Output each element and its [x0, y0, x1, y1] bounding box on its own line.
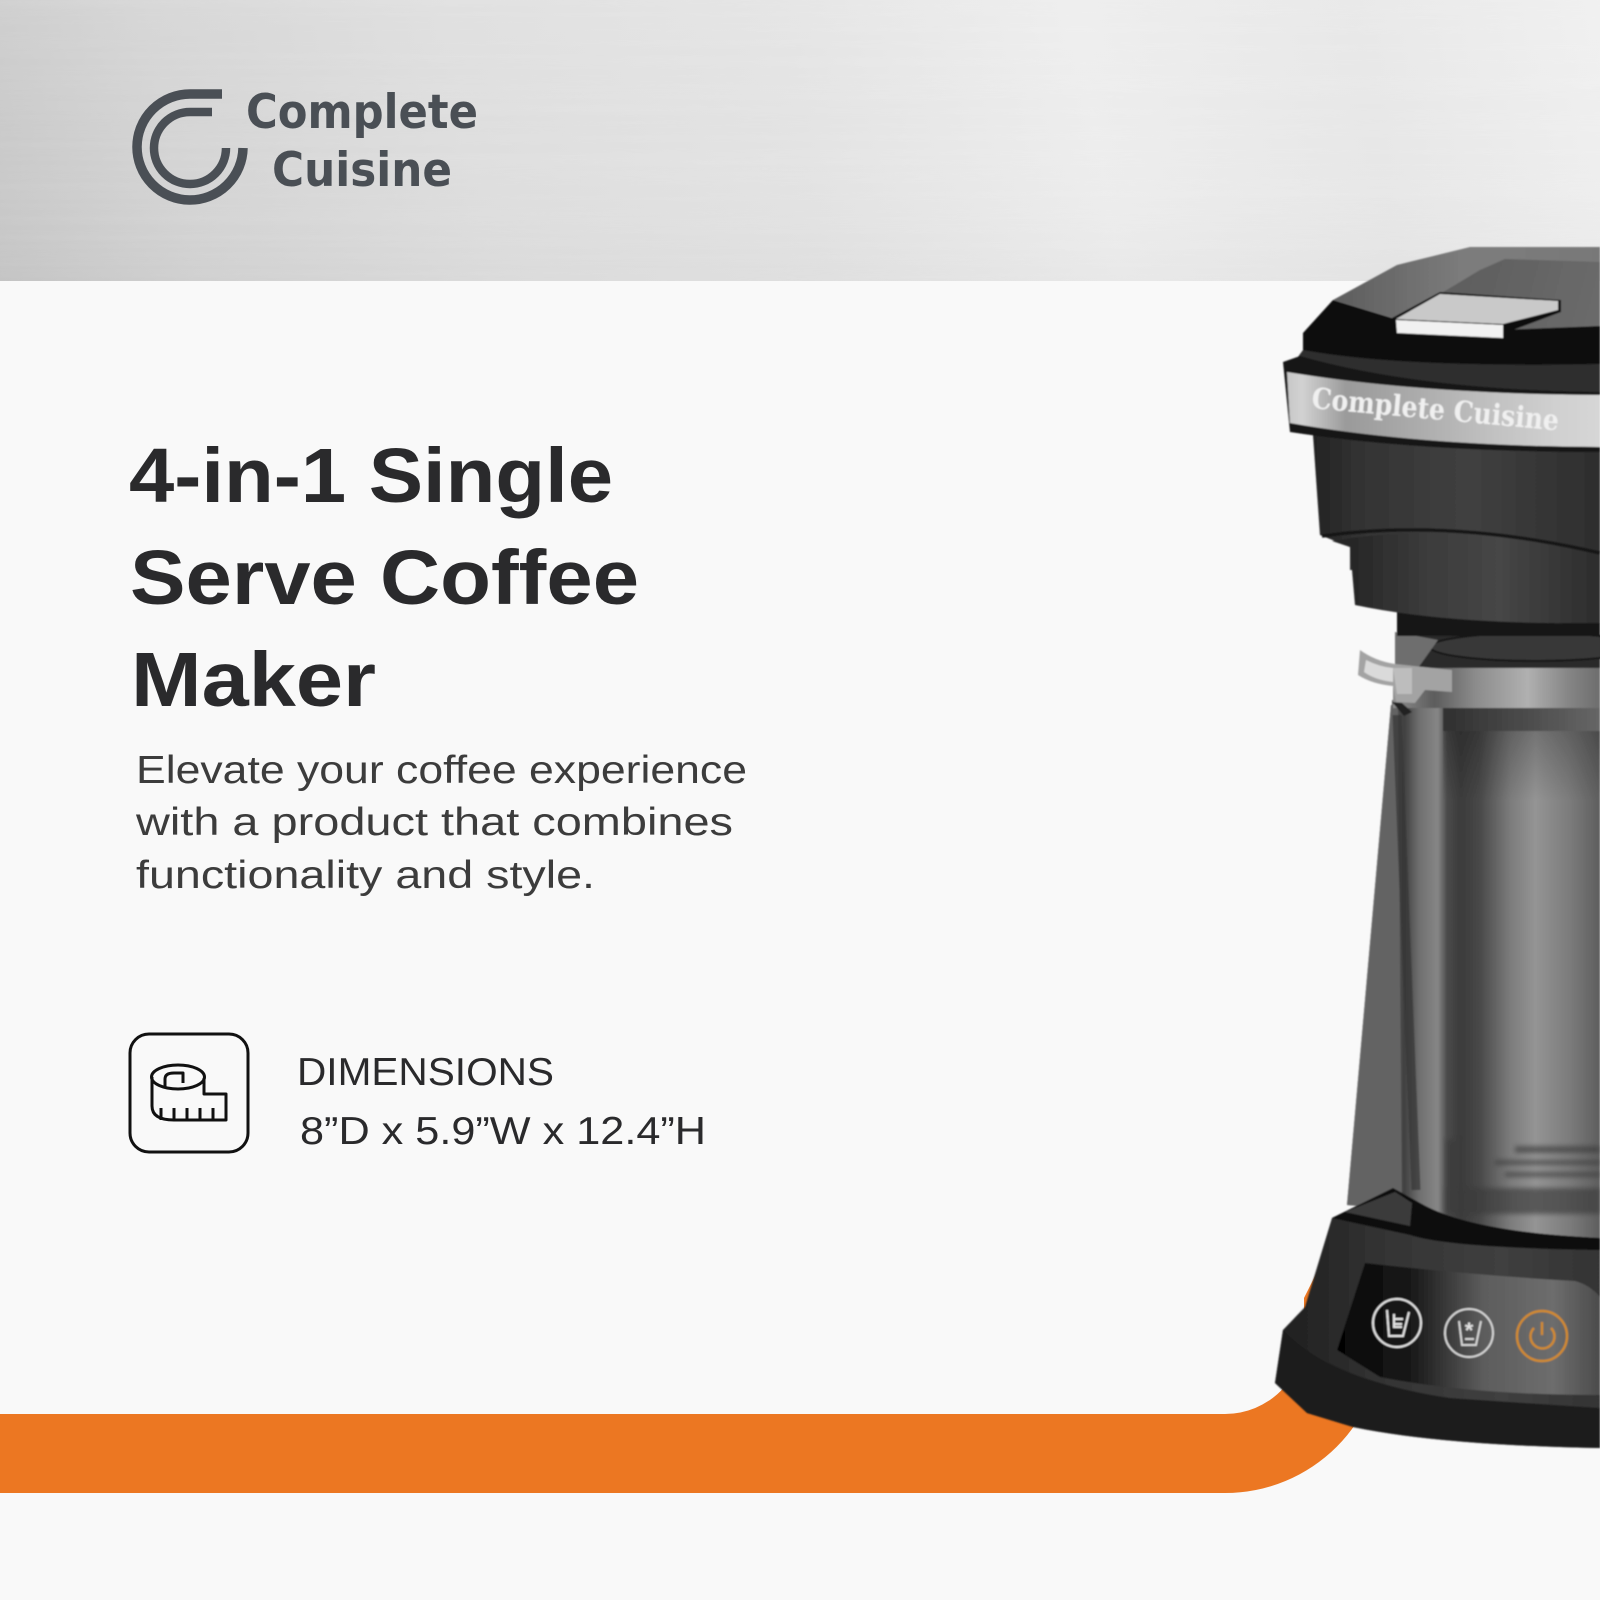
icon: measuring tape	[130, 1034, 248, 1152]
water tank	[1347, 632, 1600, 1250]
upper head section	[1313, 435, 1600, 570]
tank top ring and spout	[1358, 632, 1600, 716]
header: brushed metal banner	[0, 0, 1600, 281]
coffee maker product	[1275, 247, 1600, 1448]
neck under head	[1397, 612, 1600, 636]
logo wordmark: Complete	[246, 85, 478, 140]
title: 4-in-1 Single	[129, 433, 613, 519]
description text: functionality and style.	[136, 854, 595, 897]
base	[1275, 1188, 1600, 1448]
head seam shadow	[1322, 530, 1600, 553]
description text: Elevate your coffee experience	[136, 749, 747, 792]
button: iced	[1445, 1309, 1493, 1357]
dimensions text: DIMENSIONS	[297, 1051, 554, 1094]
title: Serve Coffee	[130, 535, 639, 621]
button: iced: *	[1465, 1318, 1474, 1343]
lid black body	[1290, 300, 1600, 400]
tank bottom ripples	[1445, 1140, 1600, 1214]
chrome collar with embossed brand: Complete Cuisine	[1310, 381, 1560, 437]
description text: with a product that combines	[135, 801, 733, 844]
title: Maker	[131, 637, 376, 723]
title	[129, 433, 639, 723]
logo wordmark: Cuisine	[272, 143, 452, 198]
logo mark: concentric C	[137, 94, 243, 200]
dimensions text: 8”D x 5.9”W x 12.4”H	[300, 1110, 706, 1153]
orange swoosh band	[0, 1272, 1383, 1493]
button: brew	[1373, 1299, 1421, 1347]
button: power	[1517, 1311, 1567, 1361]
description text	[135, 749, 747, 897]
chrome collar with embossed brand	[1283, 356, 1600, 452]
chrome button on lid	[1392, 292, 1561, 338]
lid top surface	[1333, 247, 1600, 340]
logo: Complete Cuisine	[137, 85, 478, 200]
control panel	[1337, 1263, 1600, 1395]
dimensions text	[297, 1051, 706, 1153]
logo wordmark	[246, 85, 478, 198]
lower head section	[1332, 533, 1600, 623]
